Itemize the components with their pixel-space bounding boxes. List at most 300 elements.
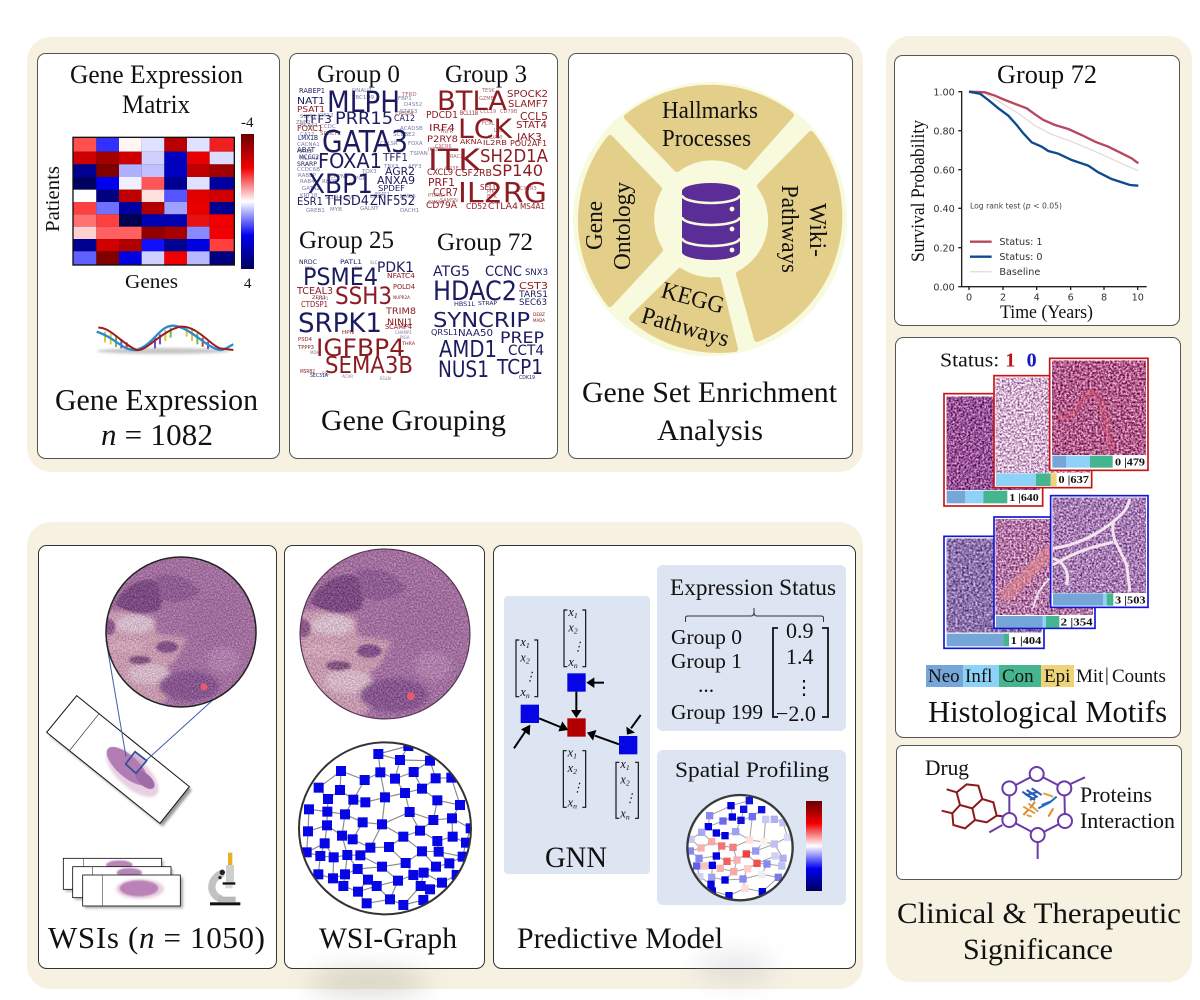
word cloud: group 25: NINJ1 xyxy=(387,318,413,328)
word cloud: group 0: FBP1 xyxy=(398,96,412,102)
word cloud: group 3: JAK3 xyxy=(516,132,542,143)
label: patients: Patients xyxy=(42,166,64,232)
survival chart xyxy=(933,87,1147,303)
status legend: Status: xyxy=(940,350,999,372)
slide with tissue xyxy=(47,640,237,827)
panel: gnn xyxy=(504,596,650,874)
heading: group 72: Group 72 xyxy=(437,229,533,256)
word cloud: group 3: FCRL xyxy=(482,121,495,127)
motif tiles: status 0 xyxy=(944,496,1148,648)
word cloud: group 25: SEC31A xyxy=(310,373,329,379)
caption: gene set enrichment analysis: Analysis xyxy=(657,414,763,447)
gnn diagram: n xyxy=(526,691,530,700)
word cloud: group 3: P2RY8 xyxy=(427,135,458,145)
word cloud: group 25: ACVR xyxy=(342,374,353,379)
caption: clinical and therapeutic significance: Significance xyxy=(963,933,1113,966)
gnn diagram: 1 xyxy=(526,641,530,650)
word cloud: group 0: MLPH2 xyxy=(300,156,319,162)
word cloud: group 3: CTLA4 xyxy=(488,202,518,212)
word cloud: group 0: RAB4 xyxy=(300,179,315,185)
panel: spatial profiling xyxy=(657,750,846,905)
word cloud: group 3: CCR7 xyxy=(433,186,458,199)
word cloud: group 25: TPPP3 xyxy=(297,345,314,351)
word cloud: group 25: PDK1 xyxy=(377,260,414,276)
survival chart: 0.80 xyxy=(933,126,955,137)
panel: wsi graph card xyxy=(284,546,484,968)
caption: sample size: n = 1082 xyxy=(101,417,213,452)
word cloud: group 0: THSD4 xyxy=(324,194,369,209)
group list: Group 1 xyxy=(671,649,742,673)
word cloud: group 0: FOXA1 xyxy=(318,149,382,173)
cell type legend xyxy=(926,665,1166,687)
word cloud: group 0: FOXC1 xyxy=(297,124,323,133)
word cloud: group 72: TCP1 xyxy=(496,355,543,379)
word cloud: group 0: SPDEF2 xyxy=(320,131,341,137)
label: wiki pathways: Wiki- xyxy=(804,203,830,257)
label: proteins interaction xyxy=(1080,782,1175,833)
cell type legend: Epi xyxy=(1044,666,1070,687)
cell type legend: Neo xyxy=(928,666,960,687)
word cloud: group 0: SCUBE2 xyxy=(393,132,415,138)
label: gene ontology: Gene xyxy=(582,201,608,250)
cell type legend: Mit xyxy=(1076,666,1104,687)
gnn diagram: ⋮ xyxy=(571,780,584,794)
group list: Group 199 xyxy=(671,700,763,724)
heading: gene expression matrix: Gene Expression xyxy=(70,60,243,89)
word cloud: group 72: CDK19 xyxy=(519,375,535,381)
word cloud: group 3: CXCL9 xyxy=(427,168,453,178)
word cloud: group 0: GREB1 xyxy=(306,208,325,214)
word cloud: group 25: NRDC xyxy=(299,259,317,266)
word cloud: group 3: POU2AF1 xyxy=(510,139,547,148)
heatmap colorbar: -4 xyxy=(241,115,254,131)
survival chart: 1.00 xyxy=(933,87,955,98)
gnn diagram: 1 xyxy=(573,752,577,761)
word cloud: group 0: MLPH xyxy=(327,85,400,119)
status legend: 1 xyxy=(1005,350,1015,372)
word cloud: group 0: DACH1 xyxy=(400,208,419,214)
word cloud: group 25: SEMA3B xyxy=(325,353,413,379)
icon: drug molecule xyxy=(942,784,1006,828)
group list: ... xyxy=(698,673,714,697)
gnn diagram: 2 xyxy=(573,767,577,776)
word cloud: group 0: XBP1 xyxy=(308,169,373,200)
word cloud: group 3: IKZF3 xyxy=(428,147,442,153)
cell type legend: Infl xyxy=(965,666,992,687)
word cloud: group 25: MSRB2 xyxy=(300,369,315,375)
gnn label: GNN xyxy=(545,841,607,874)
word cloud: group 25: TCEAL3 xyxy=(296,286,333,297)
word cloud: group 0: SRARP xyxy=(297,161,317,168)
segment: gene ontology xyxy=(581,138,660,304)
label: wiki pathways xyxy=(776,185,830,273)
word cloud: group 0: AGR2 xyxy=(385,165,415,178)
word cloud: group 0: CA12 xyxy=(394,114,415,124)
word cloud: group 25: MDH xyxy=(310,350,320,355)
word cloud: group 25: PSD4 xyxy=(298,337,312,343)
gnn diagram: 2 xyxy=(526,656,530,665)
word cloud: group 0: CACNA1 xyxy=(297,142,320,148)
label: kegg pathways: Pathways xyxy=(638,303,732,353)
survival chart: 2 xyxy=(1000,292,1006,303)
word cloud: group 3: CCL5 xyxy=(520,110,548,123)
caption: wsis: WSIs (n = 1050) xyxy=(48,920,265,955)
chart title: group 72: Group 72 xyxy=(997,60,1097,89)
word cloud: group 0: SLC44 xyxy=(325,195,343,201)
word cloud: group 72: PREP xyxy=(500,328,544,347)
word cloud: group 25: IGFBP4 xyxy=(316,334,405,362)
label: gene ontology xyxy=(582,182,636,270)
word cloud: group 25: SCAMP4 xyxy=(385,323,413,331)
word cloud: group 25: SRPK1 xyxy=(298,308,382,339)
word cloud: group 0: GATA2 xyxy=(302,186,320,192)
word cloud: group 0: CCDC6B xyxy=(297,167,320,173)
gnn diagram: 2 xyxy=(574,626,578,635)
gnn diagram: x xyxy=(568,761,573,775)
word cloud: group 3 xyxy=(426,86,549,212)
panel: gene grouping card xyxy=(290,54,558,458)
motif tiles: status 0: 1 |404 xyxy=(1011,636,1042,647)
cell type legend: Counts xyxy=(1112,666,1166,687)
word cloud: group 3: AKNA xyxy=(460,138,482,146)
panel: clinical significance background xyxy=(886,36,1192,982)
gnn diagram: 1 xyxy=(574,611,578,620)
caption: gene grouping: Gene Grouping xyxy=(321,404,506,437)
word cloud: group 72: HDAC2 xyxy=(433,276,517,307)
word cloud: group 72: NUS1 xyxy=(438,358,489,383)
gnn diagram: ⋮ xyxy=(624,791,636,805)
word cloud: group 0: PSAT1 xyxy=(297,105,325,114)
word cloud: group 3: TNFR xyxy=(439,129,454,135)
word cloud: group 0: LMX1B xyxy=(298,134,318,142)
word cloud: group 3: CSF2RB xyxy=(455,168,492,179)
slide stack xyxy=(63,858,183,908)
gnn diagram: x xyxy=(568,796,573,810)
word cloud: group 0: RABEP1 xyxy=(299,87,325,95)
gnn diagram: n xyxy=(573,802,577,811)
word cloud: group 0: NAT1 xyxy=(297,96,325,107)
matrix values xyxy=(773,618,828,726)
word cloud: group 3: GZMB xyxy=(479,96,495,102)
panel: survival curve card xyxy=(894,56,1180,326)
spatial graph map xyxy=(687,795,793,900)
word cloud: group 25: EGLN xyxy=(380,376,391,381)
word cloud: group 0: TFF3 xyxy=(302,113,332,126)
heading: expression status: Expression Status xyxy=(670,575,836,600)
word cloud: group 0: DNALI1 xyxy=(352,88,372,94)
panel: predictive model card xyxy=(494,546,856,968)
word cloud: group 3: GIMAP xyxy=(428,200,444,206)
word cloud: group 3: ADAM xyxy=(487,135,502,141)
word cloud: group 3: RAC2 xyxy=(450,154,463,160)
status legend xyxy=(940,350,1037,372)
word cloud: group 0: SPDEF xyxy=(378,184,405,193)
icon: dna helix xyxy=(97,326,233,354)
word cloud: group 25: ZBP1 xyxy=(318,296,329,301)
gnn diagram: ⋮ xyxy=(572,640,584,654)
word cloud: group 25 xyxy=(296,259,416,381)
survival chart: 8 xyxy=(1101,292,1107,303)
survival chart: 0.40 xyxy=(933,204,955,215)
word cloud: group 0: CCDC xyxy=(320,124,336,130)
word cloud: group 25: THRA xyxy=(401,341,415,346)
y axis label: Survival Probability xyxy=(908,120,929,262)
word cloud: group 3: CXCR6 xyxy=(435,144,452,150)
word cloud: group 25: CTDSP1 xyxy=(301,300,328,309)
label: gene ontology: Ontology xyxy=(610,182,636,270)
caption: gene set enrichment analysis: Gene Set Enrichment xyxy=(582,376,838,409)
label: kegg pathways xyxy=(638,278,732,353)
survival chart: 6 xyxy=(1068,292,1074,303)
gnn diagram: n xyxy=(574,661,578,670)
cell type legend: Con xyxy=(1002,666,1034,687)
matrix values: −2.0 xyxy=(776,701,816,726)
word cloud: group 3: SAMSN xyxy=(440,198,458,204)
word cloud: group 3: CD79B xyxy=(500,109,518,115)
word cloud: group 0: GALNT xyxy=(360,206,379,212)
word cloud: group 0: AR xyxy=(345,182,353,188)
motif tiles: status 1: 0 |479 xyxy=(1115,457,1145,468)
gnn diagram: n xyxy=(626,812,630,821)
word cloud: group 25: SSH3 xyxy=(335,282,392,310)
brace xyxy=(686,608,824,622)
word cloud: group 0: RHOB xyxy=(322,179,338,185)
word cloud: group 3: SELL xyxy=(480,183,497,192)
word cloud: group 0: CRIP1 xyxy=(370,194,386,200)
caption: predictive model: Predictive Model xyxy=(517,922,723,955)
label: drug: Drug xyxy=(925,755,969,780)
panel: gene expression background xyxy=(27,37,863,472)
panel: whole slide image background xyxy=(27,522,863,989)
matrix values: 0.9 xyxy=(786,618,814,643)
motif tiles: status 1: 1 |640 xyxy=(1009,493,1039,504)
group list: Group 0 xyxy=(671,625,742,649)
icon: protein ring xyxy=(989,767,1085,859)
label: hallmarks processes xyxy=(662,98,758,152)
heatmap xyxy=(72,137,235,266)
word cloud: group 72 xyxy=(431,264,548,383)
heading: spatial profiling: Spatial Profiling xyxy=(675,757,829,782)
word cloud: group 0: ZNF552 xyxy=(370,194,415,209)
word cloud: group 3: LCK xyxy=(458,114,513,145)
word cloud: group 3: CD52 xyxy=(466,202,487,211)
survival chart: 0.60 xyxy=(933,165,955,176)
gnn diagram: x xyxy=(520,650,526,664)
word cloud: group 25: SLC xyxy=(370,260,378,265)
chart: pathway wheel xyxy=(573,82,847,356)
word cloud: group 3: PDCD1 xyxy=(426,110,458,121)
word cloud: group 3: CD3E xyxy=(445,166,459,172)
word cloud: group 0: ST4S3 xyxy=(400,109,418,115)
word cloud: group 3: SPOCK2 xyxy=(507,89,548,100)
matrix values: ⋮ xyxy=(794,677,814,699)
word cloud: group 72: SNX3 xyxy=(525,268,548,278)
word cloud: group 72: ATG5 xyxy=(433,264,470,280)
word cloud: group 0: KIF12 xyxy=(318,113,333,119)
caption: clinical and therapeutic significance xyxy=(897,897,1181,966)
label: hallmarks processes: Processes xyxy=(662,126,751,152)
group list xyxy=(671,625,763,724)
segment: kegg pathways xyxy=(632,271,735,350)
survival chart: 0 xyxy=(966,292,972,303)
word cloud: group 3: SH2D1A xyxy=(480,146,549,167)
word cloud: group 25: PATL1 xyxy=(340,259,362,266)
word cloud: group 0: CAPN8 xyxy=(330,174,349,180)
word cloud: group 0: TBC1D9 xyxy=(351,95,375,101)
survival chart: Status: 0 xyxy=(999,252,1043,263)
caption: gene set enrichment analysis xyxy=(582,376,838,447)
caption: histological motifs: Histological Motifs xyxy=(928,695,1167,729)
spatial colorbar xyxy=(806,801,822,891)
panel: histological motifs card xyxy=(896,338,1180,738)
word cloud: group 3: IL2RB xyxy=(483,139,507,147)
word cloud: group 3: PRF1 xyxy=(428,176,455,189)
word cloud: group 72: NAA50 xyxy=(458,328,493,339)
word cloud: group 3: BCL11B xyxy=(460,110,478,117)
caption: clinical and therapeutic significance: Clinical & Therapeutic xyxy=(897,897,1181,930)
word cloud: group 0: TSPAN xyxy=(409,151,428,157)
icon: database xyxy=(682,183,740,260)
gnn diagram: x xyxy=(568,746,573,760)
word cloud: group 72: MADA xyxy=(533,318,545,323)
survival chart: Baseline xyxy=(999,267,1040,278)
panel: wsi card xyxy=(38,546,276,968)
word cloud: group 0: ANXA9 xyxy=(377,174,415,187)
graph circle xyxy=(299,741,476,914)
icon: microscope xyxy=(210,853,240,905)
label: proteins interaction: Proteins xyxy=(1080,782,1152,807)
heading: group 0: Group 0 xyxy=(317,61,400,88)
gnn diagram: ⋮ xyxy=(524,670,536,684)
word cloud: group 0 xyxy=(296,85,428,214)
word cloud: group 72: CCT4 xyxy=(508,343,544,359)
heading: group 3: Group 3 xyxy=(445,61,527,88)
word cloud: group 0: PGR xyxy=(355,176,367,182)
word cloud: group 3: LTB xyxy=(494,128,503,134)
word cloud: group 0: BCAS1 xyxy=(300,123,318,129)
word cloud: group 25: POLD4 xyxy=(393,283,416,291)
word cloud: group 0: FSIP1 xyxy=(375,192,390,198)
word cloud: group 0: ACADSB xyxy=(400,126,423,132)
motif tiles: status 0: 3 |503 xyxy=(1115,596,1146,607)
word cloud: group 3: STAT4 xyxy=(516,120,547,131)
panel: gene set enrichment card xyxy=(568,54,852,458)
heading: gene expression matrix: Matrix xyxy=(122,90,190,119)
gnn diagram: x xyxy=(620,757,626,771)
word cloud: group 0: TOX3 xyxy=(361,169,377,175)
word cloud: group 0: ABAT xyxy=(297,146,316,154)
word cloud: group 0: KRT18 xyxy=(300,193,318,199)
word cloud: group 25: ZER1 xyxy=(312,295,327,300)
label: genes: Genes xyxy=(125,271,178,293)
word cloud: group 3: PIK3 xyxy=(487,189,498,195)
cell type legend: | xyxy=(1105,665,1109,686)
label: hallmarks processes: Hallmarks xyxy=(662,98,758,124)
word cloud: group 3: CXCR3 xyxy=(520,186,537,192)
word cloud: group 0: TFF1 xyxy=(382,151,408,164)
survival chart: 0.20 xyxy=(933,243,955,254)
word cloud: group 25: SEC xyxy=(322,371,330,376)
word cloud: group 0: SIDT1 xyxy=(300,114,316,120)
word cloud: group 72: TARS1 xyxy=(518,290,548,300)
word cloud: group 72: HBS1L xyxy=(454,301,476,308)
panel: expression status xyxy=(657,565,846,731)
word cloud: group 25: HPN xyxy=(342,330,354,336)
survival chart: Log rank test (p < 0.05) xyxy=(970,201,1062,210)
panel: gene expression card xyxy=(38,54,280,458)
word cloud: group 0: CELSR xyxy=(380,141,398,147)
matrix values: 1.4 xyxy=(786,644,814,669)
word cloud: group 25: ZNF xyxy=(305,266,314,271)
word cloud: group 0: ERBB4 xyxy=(395,111,414,117)
word cloud: group 25: TRIM8 xyxy=(385,307,416,317)
word cloud: group 0: D4S52 xyxy=(404,102,422,108)
word cloud: group 72: CST3 xyxy=(519,281,548,292)
word cloud: group 0: ZNF2 xyxy=(296,120,311,126)
segment: wiki pathways xyxy=(739,134,839,339)
gnn diagram xyxy=(514,605,641,821)
word cloud: group 3: CCL19 xyxy=(480,109,496,115)
gnn diagram: x xyxy=(568,655,574,669)
word cloud: group 3: BTK xyxy=(487,194,497,200)
word cloud: group 3: TESK xyxy=(481,88,495,94)
gnn diagram: x xyxy=(620,806,626,820)
word cloud: group 0: NME5 xyxy=(400,194,416,200)
word cloud: group 3: IL2RG xyxy=(458,176,547,209)
caption: wsi-graph: WSI-Graph xyxy=(319,922,457,955)
word cloud: group 25: CHAMP1 xyxy=(395,330,412,335)
panel: drug interaction card xyxy=(896,746,1182,880)
word cloud: group 25: NUPR2A xyxy=(393,295,410,300)
word cloud: group 72: SYNCRIP xyxy=(433,308,530,332)
bottom shadow smudge left xyxy=(308,969,428,995)
word cloud: group 0: MCCC2 xyxy=(299,154,319,161)
word cloud: group 3: ITK xyxy=(428,143,481,177)
word cloud: group 3: IRF4 xyxy=(429,123,455,134)
word cloud: group 25: ELP xyxy=(355,266,363,271)
word cloud: group 0: TBX3 xyxy=(383,164,399,170)
tissue zoom circle xyxy=(103,556,257,708)
motif tiles: status 1 xyxy=(944,358,1148,506)
word cloud: group 72: DEBZ xyxy=(533,312,545,317)
word cloud: group 25: PIGA xyxy=(400,335,410,340)
word cloud: group 0: CA12 xyxy=(300,132,315,138)
heatmap colorbar: 4 xyxy=(244,276,252,292)
survival chart: 0.00 xyxy=(933,282,955,293)
word cloud: group 72: SEC63 xyxy=(519,298,547,308)
word cloud: group 0: ESR1 xyxy=(297,195,323,208)
gnn diagram: 1 xyxy=(626,763,630,772)
motif tiles: status 1: 0 |637 xyxy=(1058,475,1090,486)
heading: group 25: Group 25 xyxy=(299,227,394,254)
word cloud: group 0: TFRD xyxy=(401,92,417,98)
word cloud: group 25: NFATC4 xyxy=(387,272,416,280)
word cloud: group 0: RABEP xyxy=(298,173,317,179)
word cloud: group 0: MYB xyxy=(330,207,342,213)
gnn diagram: x xyxy=(520,685,526,699)
word cloud: group 25: PSME4 xyxy=(303,263,378,291)
word cloud: group 72: STRAP xyxy=(478,301,497,307)
label: wiki pathways: Pathways xyxy=(776,185,802,273)
word cloud: group 3: BTLA xyxy=(437,86,508,117)
word cloud: group 3: PTPRC xyxy=(428,193,444,199)
label: proteins interaction: Interaction xyxy=(1080,808,1175,833)
word cloud: group 0: ARG2 xyxy=(297,149,312,155)
survival chart: Status: 1 xyxy=(999,237,1043,248)
status legend: 0 xyxy=(1027,350,1037,372)
gnn diagram: x xyxy=(620,772,626,786)
survival chart: 10 xyxy=(1132,292,1144,303)
